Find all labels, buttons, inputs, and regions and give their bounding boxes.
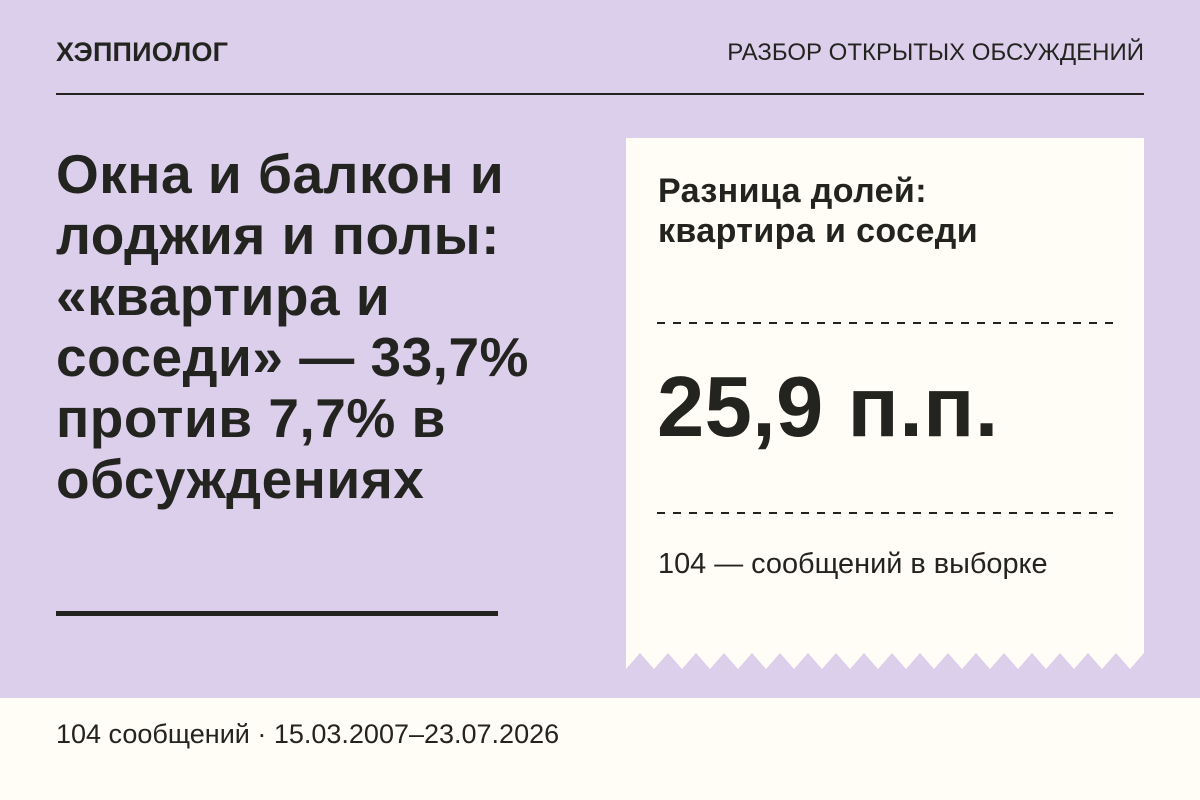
- footer text: 104 сообщений · 15.03.2007–23.07.2026: [56, 719, 559, 749]
- dashed divider top: [657, 322, 1113, 324]
- headline: против 7,7% в: [56, 387, 446, 449]
- brand name: ХЭППИОЛОГ: [56, 37, 228, 67]
- card heading: квартира и соседи: [658, 212, 978, 250]
- headline: обсуждениях: [56, 448, 424, 510]
- headline: Окна и балкон и: [56, 143, 504, 205]
- footer band: [0, 698, 1200, 800]
- dashed divider bottom: [657, 512, 1113, 514]
- headline: лоджия и полы:: [56, 204, 500, 266]
- header caption: РАЗБОР ОТКРЫТЫХ ОБСУЖДЕНИЙ: [727, 39, 1144, 66]
- key figure: 25,9 п.п.: [657, 360, 999, 455]
- headline underline: [56, 611, 498, 616]
- header rule: [56, 93, 1144, 95]
- card heading: Разница долей:: [658, 172, 927, 210]
- card note: 104 — сообщений в выборке: [658, 548, 1048, 580]
- headline: «квартира и: [56, 265, 390, 327]
- card heading: [658, 172, 978, 250]
- headline: [56, 143, 529, 510]
- headline: соседи» — 33,7%: [56, 326, 529, 388]
